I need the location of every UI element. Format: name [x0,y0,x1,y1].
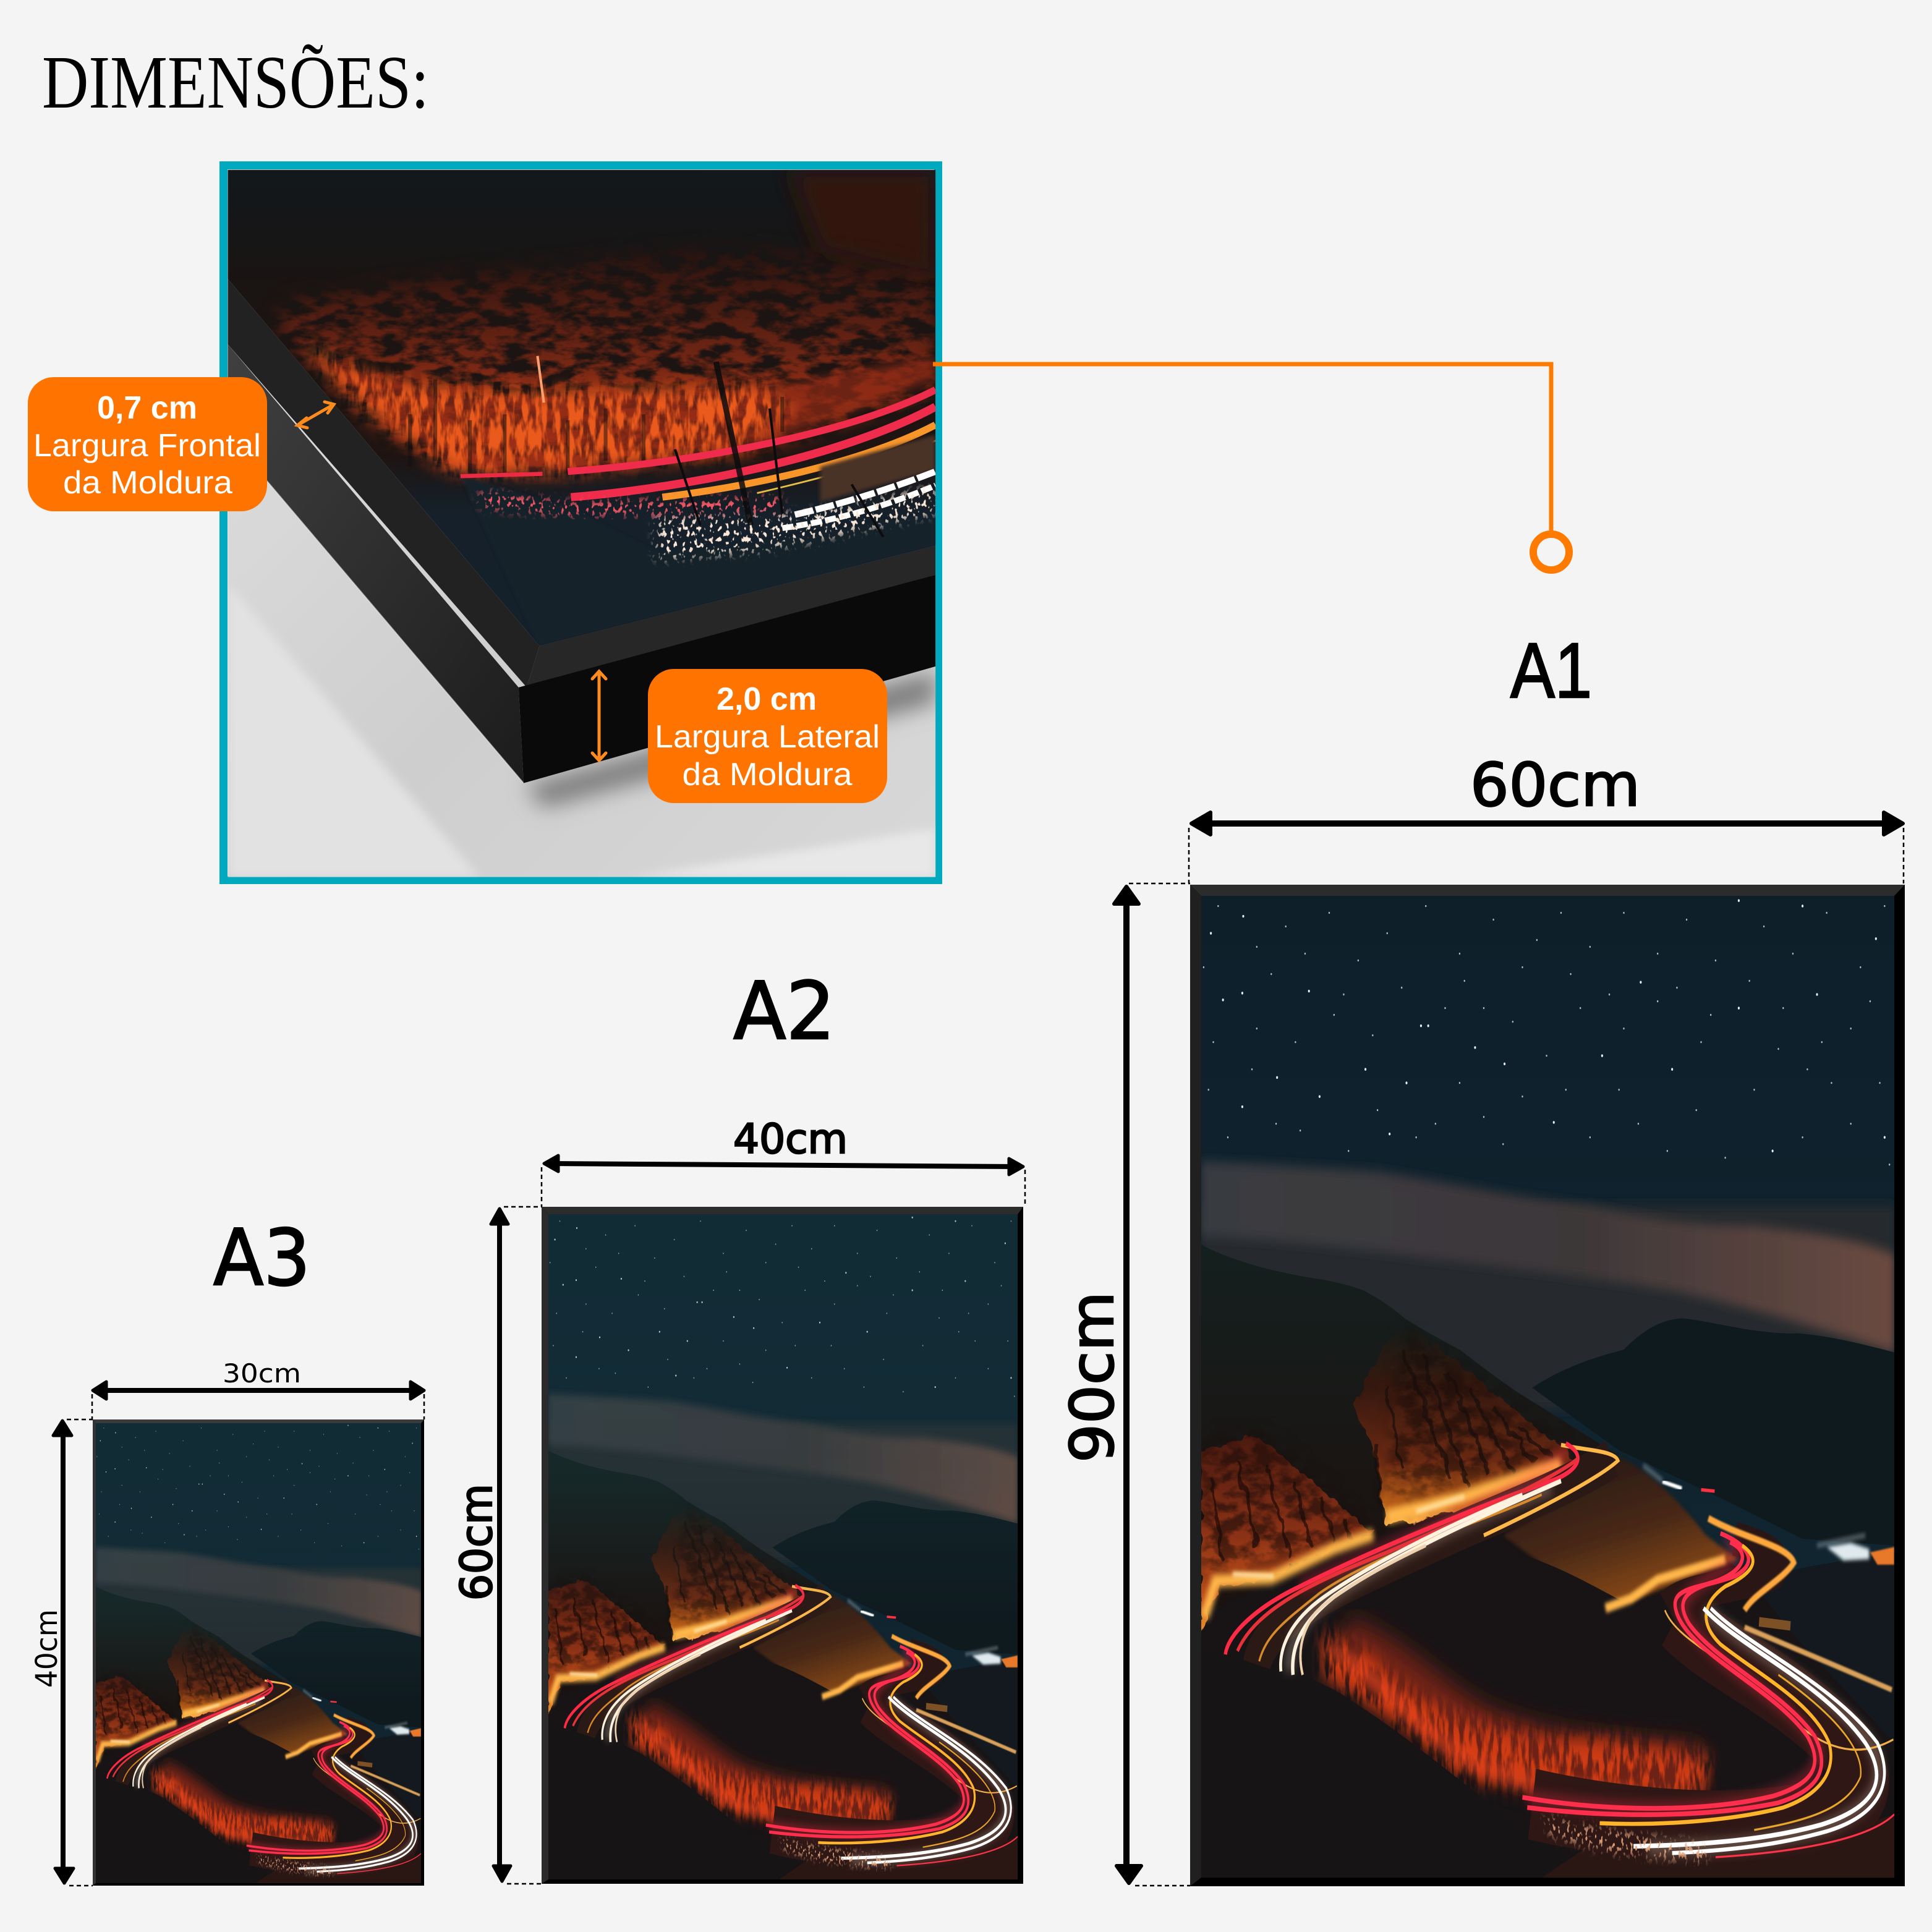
callout: side width [648,669,887,803]
callout: front width: 0,7 cm [97,390,197,426]
heading: A3: A3 [213,1212,310,1303]
callout: side width: Largura Lateral [655,719,880,755]
height dimension: A3 [30,1419,93,1886]
callout: front width [28,377,267,511]
panel: frame corner detail [224,166,938,880]
width dimension: A2: 40cm [733,1115,848,1163]
heading: A1: A1 [1510,627,1592,714]
callout: side width: da Moldura [683,757,853,793]
height dimension: A1 [1058,883,1190,1886]
callout: front width: da Moldura [63,465,232,501]
poster: A1 [1190,885,1905,1886]
arrow: front width [297,402,334,428]
poster: A2 [542,1207,1023,1884]
width dimension: A1: 60cm [1470,751,1640,820]
connector line to A1 [933,364,1569,570]
title: DIMENSÕES: [42,41,429,124]
width dimension: A1 [1189,751,1904,883]
width dimension: A3: 30cm [223,1358,301,1389]
callout: side width: 2,0 cm [717,681,817,717]
height dimension: A1: 90cm [1058,1292,1127,1463]
poster: A3 [93,1419,424,1886]
arrow: side width [592,671,606,760]
width dimension: A3 [92,1358,424,1419]
heading: A2: A2 [733,966,835,1058]
height dimension: A3: 40cm [30,1609,64,1688]
height dimension: A2: 60cm [451,1484,502,1601]
callout: front width: Largura Frontal [33,428,261,464]
height dimension: A2 [451,1207,542,1884]
width dimension: A2 [542,1115,1025,1207]
